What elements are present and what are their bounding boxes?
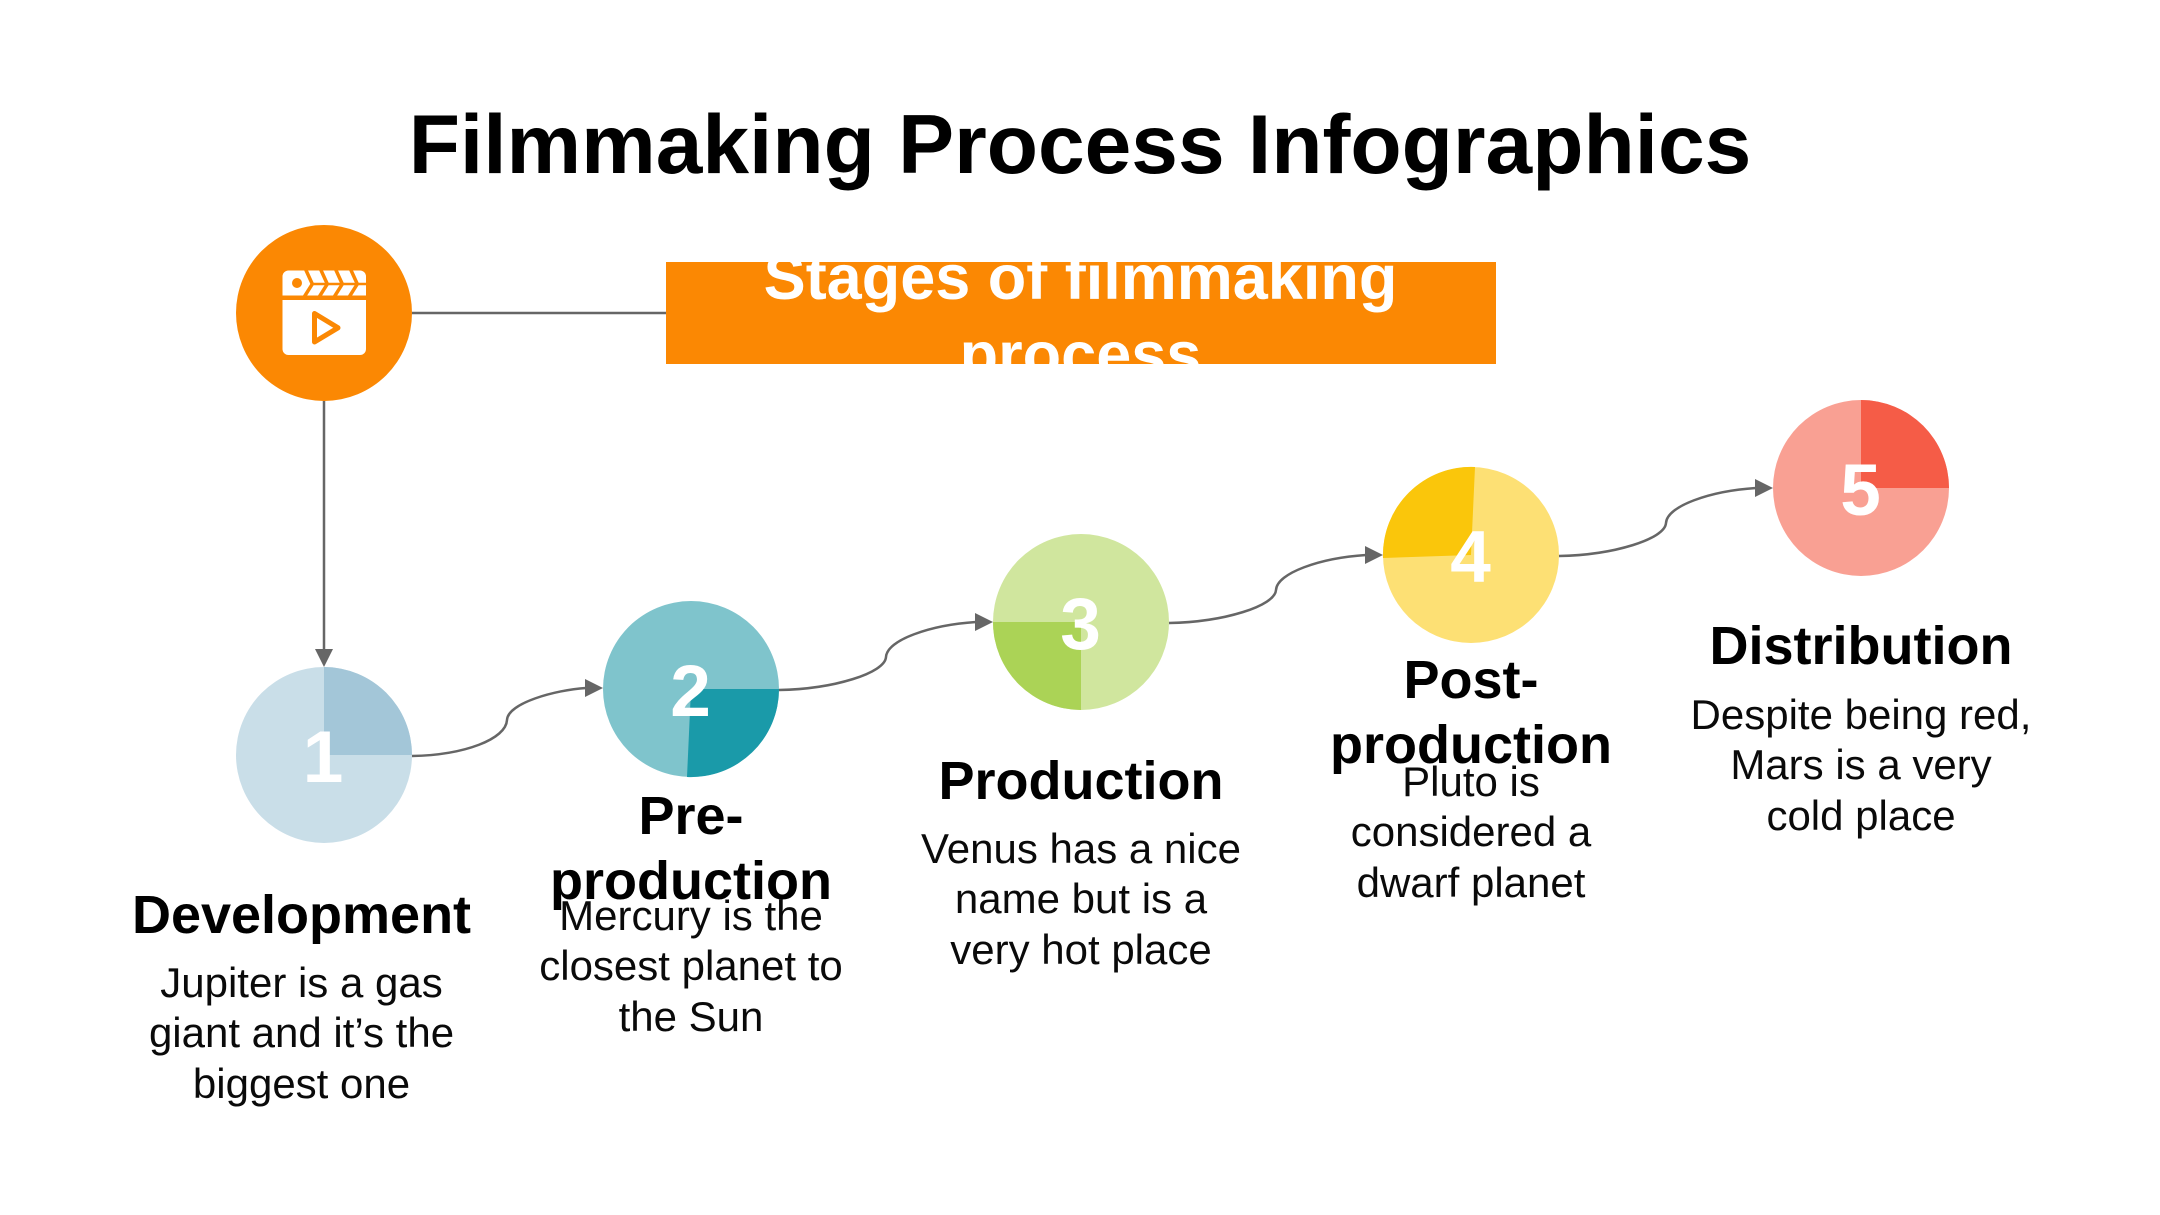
icon: clapperboard in orange circle	[236, 225, 412, 401]
step 2 label	[539, 786, 843, 1040]
step 1 label: Jupiter is a gas	[160, 959, 443, 1006]
banner: stages of filmmaking process: process	[960, 320, 1201, 390]
step 1 label: giant and it’s the	[149, 1009, 454, 1056]
step 3 label: Production	[939, 751, 1223, 811]
step 3 label	[921, 751, 1241, 973]
step 2 label: the Sun	[619, 993, 763, 1040]
step 5 label: Distribution	[1710, 616, 2012, 676]
step 3 circle: 3	[1060, 584, 1101, 665]
step 4 label: Pluto is	[1402, 758, 1540, 805]
step 3 label: name but is a	[955, 875, 1208, 922]
step 5 label: Mars is a very	[1730, 741, 1992, 788]
step 4 label: production	[1330, 715, 1612, 775]
banner: stages of filmmaking process: Stages of filmmaking	[764, 243, 1397, 313]
step 2 circle	[603, 601, 779, 777]
arrow: icon to banner connector	[412, 312, 666, 314]
step 2 label: Pre-	[638, 786, 744, 846]
step 3 circle	[993, 534, 1169, 710]
step 2 label: closest planet to	[539, 942, 843, 989]
step 4 label: dwarf planet	[1357, 859, 1586, 906]
step 1 label: Development	[132, 885, 471, 945]
step 3 label: Venus has a nice	[921, 825, 1241, 872]
step 1 circle	[236, 667, 412, 843]
step 5 label	[1691, 616, 2031, 839]
step 5 label: Despite being red,	[1691, 691, 2031, 738]
connector 1 to 2	[412, 679, 603, 756]
step 2 circle: 2	[670, 651, 711, 732]
arrow: icon down to step 1	[315, 401, 333, 667]
step 1 circle: 1	[303, 717, 343, 798]
step 2 label: Mercury is the	[559, 892, 823, 939]
connector 2 to 3	[779, 613, 993, 690]
step 5 label: cold place	[1766, 792, 1956, 839]
step 4 circle	[1383, 467, 1559, 643]
step 4 label: considered a	[1351, 808, 1592, 855]
connector 3 to 4	[1169, 546, 1383, 623]
step 4 label	[1330, 650, 1612, 906]
title: Filmmaking Process Infographics	[409, 97, 1751, 191]
banner: stages of filmmaking process	[666, 262, 1496, 364]
step 5 circle	[1773, 400, 1949, 576]
step 4 circle: 4	[1450, 517, 1491, 598]
step 1 label: biggest one	[193, 1060, 410, 1107]
step 2 label: production	[550, 851, 832, 911]
step 5 circle: 5	[1840, 450, 1881, 531]
step 3 label: very hot place	[950, 926, 1212, 973]
step 1 label	[132, 885, 471, 1107]
step 4 label: Post-	[1404, 650, 1538, 710]
connector 4 to 5	[1559, 479, 1773, 556]
